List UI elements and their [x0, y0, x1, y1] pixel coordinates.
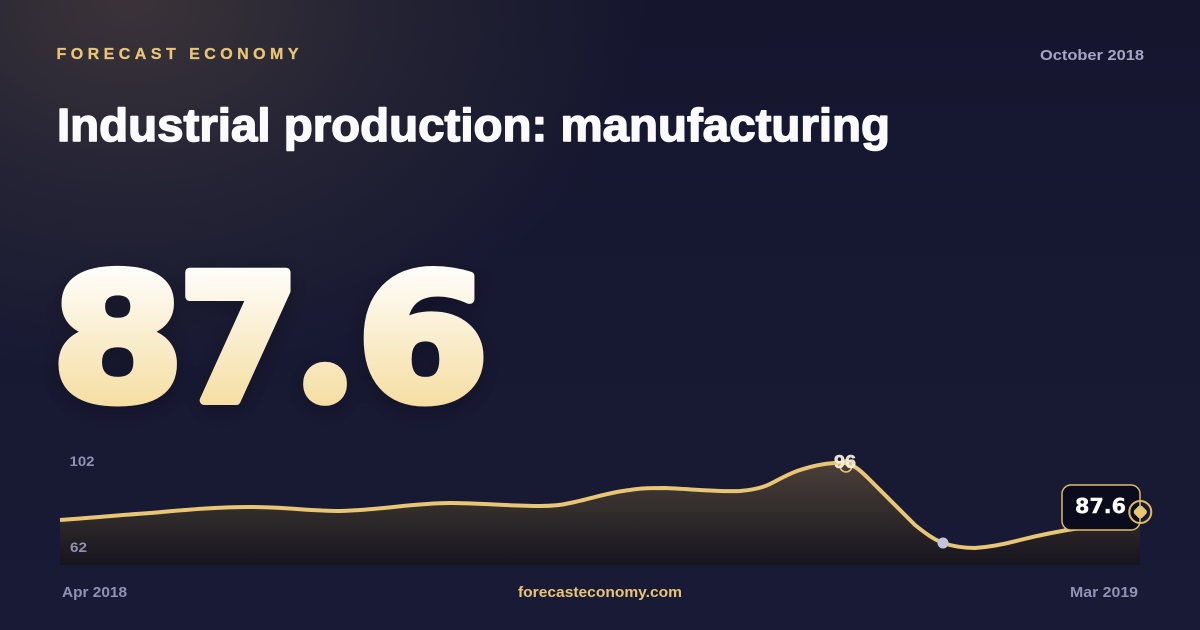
start date label: Apr 2018: [62, 584, 127, 601]
axis min label: 62: [70, 539, 87, 555]
line: [60, 463, 1080, 548]
peak value: 96: [834, 452, 856, 472]
headline value: 7: [178, 238, 300, 442]
area under line: [60, 463, 1140, 565]
low point marker: [938, 538, 948, 548]
headline value: 6: [357, 238, 489, 442]
peak marker: [840, 460, 852, 472]
sparkline chart: [60, 452, 1151, 565]
brand label: FORECAST ECONOMY: [56, 46, 299, 63]
axis max label: 102: [70, 453, 95, 469]
title: Industrial production: manufacturing: [57, 99, 890, 151]
site url: forecasteconomy.com: [518, 584, 682, 601]
date label: October 2018: [1040, 47, 1144, 64]
latest value badge: 87.6: [1075, 494, 1126, 518]
headline value: 8: [52, 238, 184, 442]
end date label: Mar 2019: [1070, 584, 1138, 601]
latest value badge: [1062, 485, 1140, 530]
headline value: [52, 238, 489, 442]
latest point marker: [1129, 501, 1151, 523]
headline value: .: [323, 374, 327, 388]
